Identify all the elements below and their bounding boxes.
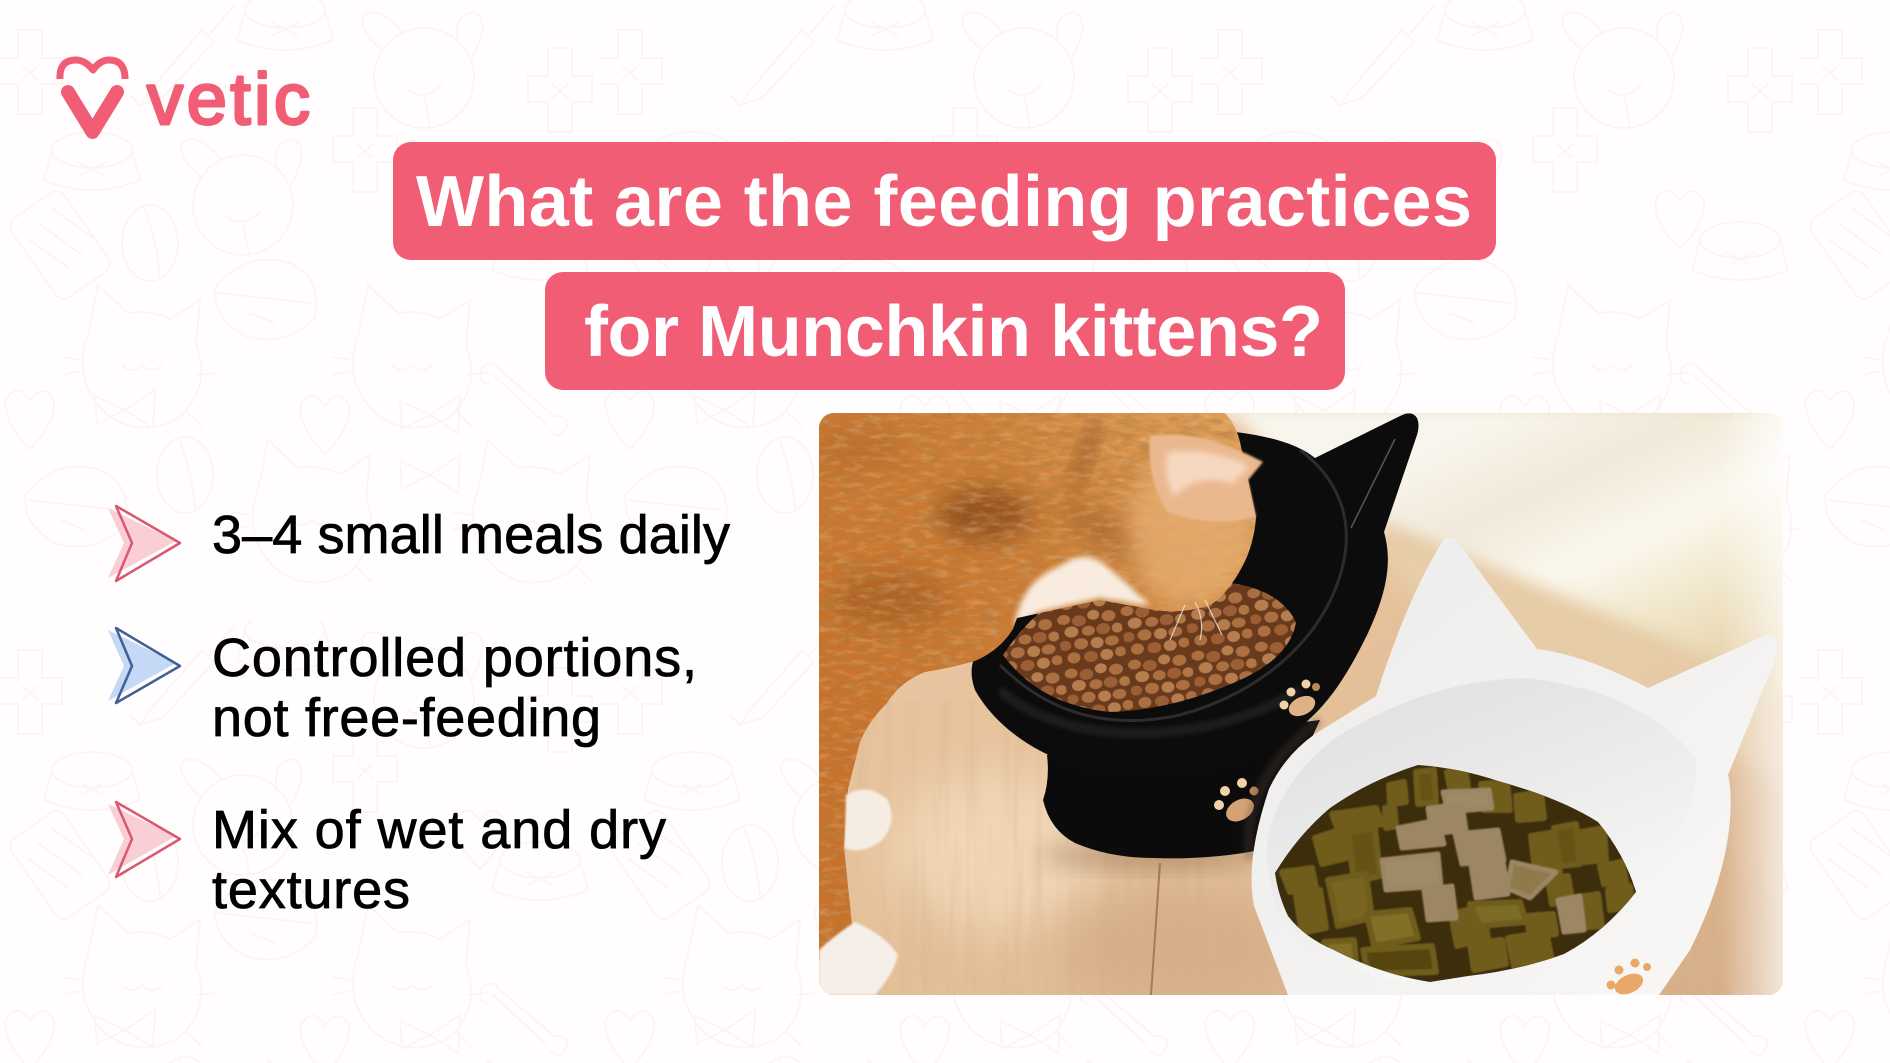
black bowl bbox=[972, 413, 1418, 858]
icon: pink arrow bbox=[108, 802, 180, 877]
white chest bbox=[1014, 557, 1150, 626]
tip 2 bbox=[108, 628, 697, 748]
title block bbox=[393, 142, 1496, 390]
tip text: not free-feeding bbox=[212, 688, 601, 748]
bowl body with ears bbox=[1252, 537, 1778, 995]
title pill line 2: for Munchkin kittens? bbox=[584, 292, 1323, 372]
icon: blue arrow bbox=[108, 628, 180, 703]
icon: gold paw lower bbox=[1214, 778, 1258, 826]
tip text bbox=[212, 628, 697, 748]
wordmark: vetic bbox=[147, 60, 310, 140]
white paw back bbox=[845, 790, 892, 850]
glossy rim bbox=[1000, 450, 1346, 721]
icon: heart and V mark bbox=[60, 60, 125, 132]
icon: gold paw on white bowl bbox=[1606, 958, 1651, 998]
pedestal bbox=[1043, 720, 1320, 858]
photo: cat eating from cat-shaped bowls bbox=[815, 405, 1800, 1010]
tip 3 bbox=[108, 800, 666, 920]
cat ear bbox=[1149, 434, 1263, 521]
orange cat bbox=[815, 412, 1269, 995]
tip 1 bbox=[108, 505, 730, 581]
title pill line 1 bbox=[393, 142, 1496, 260]
whiskers bbox=[1170, 600, 1222, 640]
title pill line 2 bbox=[545, 272, 1345, 390]
shadow under black bowl bbox=[1040, 843, 1260, 867]
bowl body with ear bbox=[972, 413, 1418, 775]
icon: gold paw upper bbox=[1280, 680, 1320, 720]
fur markings bbox=[815, 412, 1269, 953]
icon: pink arrow bbox=[108, 506, 180, 581]
tip text: 3–4 small meals daily bbox=[212, 505, 730, 565]
white paw front bbox=[819, 922, 898, 995]
tip text: Mix of wet and dry bbox=[212, 800, 666, 860]
logo: vetic bbox=[60, 60, 310, 140]
wooden floor bbox=[819, 413, 1783, 1010]
wet food bbox=[1270, 760, 1640, 985]
shadow bbox=[1249, 720, 1320, 860]
tip text bbox=[212, 800, 666, 920]
bowl well bbox=[1271, 678, 1662, 828]
head highlight bbox=[1128, 452, 1252, 608]
white bowl bbox=[1249, 537, 1778, 998]
feeding tips list bbox=[108, 505, 730, 920]
tip text: Controlled portions, bbox=[212, 628, 697, 688]
tip text: textures bbox=[212, 860, 410, 920]
kibble bbox=[1003, 583, 1296, 712]
cat silhouette bbox=[819, 413, 1256, 960]
title pill line 1: What are the feeding practices bbox=[416, 162, 1472, 242]
cream backdrop bbox=[1170, 405, 1800, 995]
